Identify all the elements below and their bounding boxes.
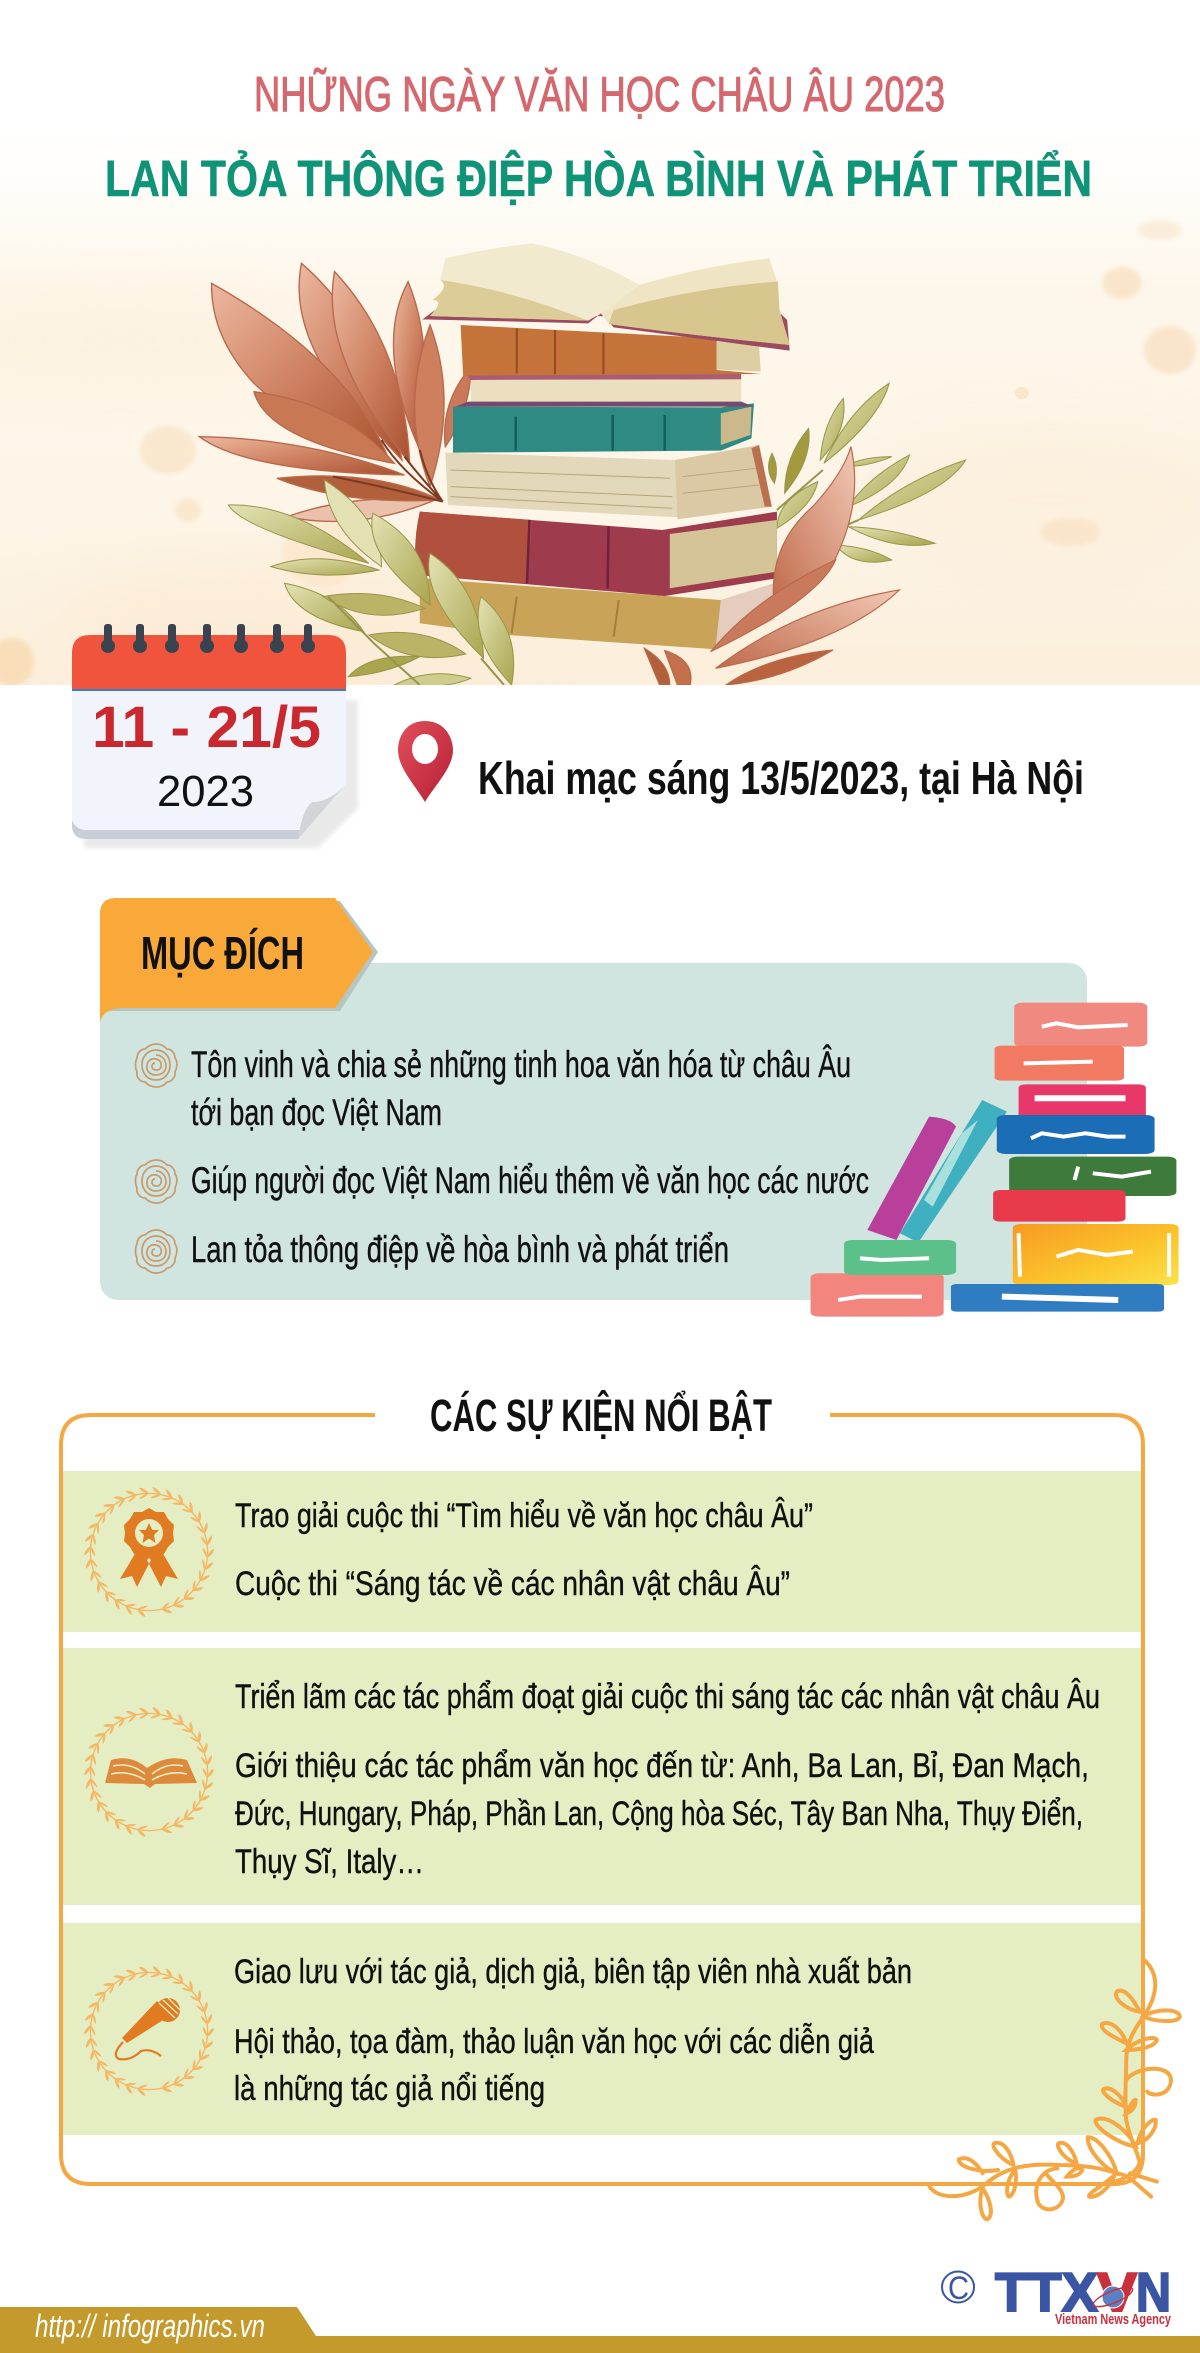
icon: rose bullet 1 [136,1044,177,1087]
footer band [0,2307,1200,2353]
event 3 text: Giao lưu với tác giả, dịch giả, biên tập viên nhà xuất bản [234,1953,912,1991]
logo globe [1091,2284,1135,2310]
logo: TTXVN [942,2261,1171,2328]
event 3 text [234,1953,912,2108]
olive leaves behind books [769,383,966,562]
event 2 text [235,1678,1100,1881]
left brown leaves [199,263,471,521]
logo letters: N [1136,2261,1171,2323]
corner flourish [929,1960,1180,2219]
icon: location pin [398,721,453,802]
copyright mark: C [948,2270,969,2306]
book 5: red [415,512,777,596]
icon: microphone in wreath [84,1966,214,2096]
panel background [100,963,1087,1300]
left olive leaves in front [228,480,514,686]
heading tag [100,898,373,1022]
book 3: teal [453,403,754,453]
tag shadow [100,901,378,1024]
book 2: cream [466,374,741,380]
watercolor background [0,201,1200,685]
event 1 text: Trao giải cuộc thi “Tìm hiểu về văn học châu Âu” [235,1497,813,1535]
calendar [72,624,358,848]
event 1 text: Cuộc thi “Sáng tác về các nhân vật châu Âu” [235,1565,790,1603]
calendar page curl [298,784,346,839]
icon: open book in wreath [84,1707,214,1837]
event row 2 [63,1648,1141,1905]
logo letters: V [1097,2261,1137,2323]
bullet 1: Tôn vinh và chia sẻ những tinh hoa văn hóa từ châu Âu [191,1044,851,1085]
date: 11 - 21/5 [92,695,321,760]
event frame [61,1415,1143,2184]
bullet 1: tới bạn đọc Việt Nam [191,1092,442,1133]
bullet 2: Giúp người đọc Việt Nam hiểu thêm về văn học các nước [191,1160,869,1201]
bullet 1 [191,1044,851,1133]
icon: rose bullet 3 [136,1230,177,1273]
book 6: yellow-brown [420,578,774,649]
icon: rose bullet 2 [136,1160,177,1203]
illustration: colorful book stack [811,1003,1179,1317]
event 2 text: Thụy Sĩ, Italy… [235,1843,424,1881]
event row 1 [63,1471,1141,1632]
book 1: orange [461,325,762,376]
event 3 text: Hội thảo, tọa đàm, thảo luận văn học với các diễn giả [234,2023,874,2061]
right pink leaves [644,447,899,685]
event row 3 [63,1923,1141,2135]
footer url: http:// infographics.vn [35,2308,265,2344]
panel: highlighted events [61,1390,1180,2219]
event 1 text [235,1497,813,1603]
logo letters: TTX [995,2261,1098,2323]
open book on top [422,310,790,351]
year: 2023 [157,767,254,816]
heading: MỤC ĐÍCH [141,927,304,979]
panel: purpose [100,898,1087,1300]
calendar rings [101,624,315,653]
logo letters [995,2261,1171,2323]
bullet 3: Lan tỏa thông điệp về hòa bình và phát triển [191,1229,729,1270]
section heading: CÁC SỰ KIỆN NỔI BẬT [430,1390,772,1441]
illustration: stacked books with leaves [199,243,966,686]
icon: medal in wreath [84,1487,214,1617]
leaf stems [333,440,443,502]
book 4: cream pages [445,453,677,517]
calendar red header [72,635,346,690]
event 3 text: là những tác giả nổi tiếng [234,2070,545,2108]
calendar shadow [84,700,358,848]
calendar page [72,690,346,839]
title: line 1: NHỮNG NGÀY VĂN HỌC CHÂU ÂU 2023 [254,68,945,122]
